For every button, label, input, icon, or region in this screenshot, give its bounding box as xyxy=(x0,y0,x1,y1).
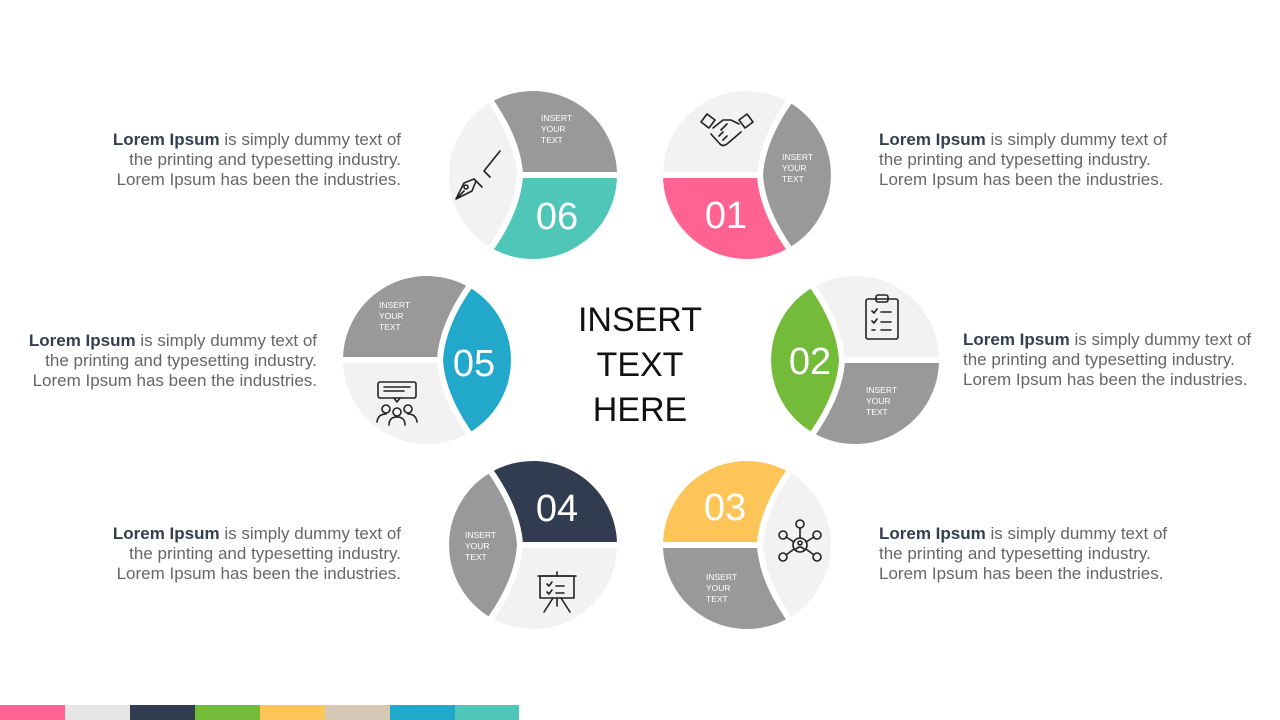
numbers: 03 xyxy=(704,487,746,529)
small labels: YOUR xyxy=(866,396,891,406)
text block 05 xyxy=(29,331,317,390)
color bar xyxy=(0,705,519,720)
numbers xyxy=(453,195,831,530)
small labels: TEXT xyxy=(379,322,401,332)
text block 02: Lorem Ipsum is simply dummy text of xyxy=(963,330,1251,349)
small labels: INSERT xyxy=(465,530,496,540)
circle 02 xyxy=(768,273,942,447)
icon: clipboard xyxy=(866,295,898,339)
text block 04: Lorem Ipsum is simply dummy text of xyxy=(113,524,401,543)
small labels: TEXT xyxy=(866,407,888,417)
text block 03: Lorem Ipsum has been the industries. xyxy=(879,564,1163,583)
text block 01: Lorem Ipsum has been the industries. xyxy=(879,170,1163,189)
text block 01: the printing and typesetting industry. xyxy=(879,150,1151,169)
circle 06 xyxy=(446,88,620,262)
circle 03 xyxy=(660,458,834,632)
text block 03 xyxy=(879,524,1167,583)
small labels: INSERT xyxy=(541,113,572,123)
circle 05 xyxy=(340,273,514,447)
numbers: 01 xyxy=(705,195,747,237)
icon: network xyxy=(779,520,821,561)
text block 01 xyxy=(879,130,1167,189)
text block 01: Lorem Ipsum is simply dummy text of xyxy=(879,130,1167,149)
numbers: 02 xyxy=(789,341,831,383)
small labels: INSERT xyxy=(782,152,813,162)
small labels xyxy=(379,113,897,604)
text block 03: Lorem Ipsum is simply dummy text of xyxy=(879,524,1167,543)
small labels: TEXT xyxy=(782,174,804,184)
text block 06 xyxy=(113,130,401,189)
small labels: YOUR xyxy=(465,541,490,551)
small labels: INSERT xyxy=(706,572,737,582)
text block 03: the printing and typesetting industry. xyxy=(879,544,1151,563)
small labels: INSERT xyxy=(379,300,410,310)
icon: handshake xyxy=(701,114,753,146)
small labels: YOUR xyxy=(706,583,731,593)
small labels: YOUR xyxy=(379,311,404,321)
numbers: 04 xyxy=(536,488,578,530)
small labels: TEXT xyxy=(706,594,728,604)
small labels: TEXT xyxy=(541,135,563,145)
small labels: TEXT xyxy=(465,552,487,562)
text block 06: Lorem Ipsum has been the industries. xyxy=(117,170,401,189)
icon: fountain pen xyxy=(456,151,500,199)
text block 04 xyxy=(113,524,401,583)
small labels: INSERT xyxy=(866,385,897,395)
numbers: 05 xyxy=(453,343,495,385)
small labels: YOUR xyxy=(541,124,566,134)
text block 05: the printing and typesetting industry. xyxy=(45,351,317,370)
icon: easel xyxy=(538,572,576,612)
center title: INSERT xyxy=(578,301,702,339)
small labels: YOUR xyxy=(782,163,807,173)
text block 05: Lorem Ipsum is simply dummy text of xyxy=(29,331,317,350)
text block 04: the printing and typesetting industry. xyxy=(129,544,401,563)
text block 02: Lorem Ipsum has been the industries. xyxy=(963,370,1247,389)
center title xyxy=(578,301,702,429)
text block 04: Lorem Ipsum has been the industries. xyxy=(117,564,401,583)
text block 05: Lorem Ipsum has been the industries. xyxy=(33,371,317,390)
circle 04 xyxy=(446,458,620,632)
icon: meeting xyxy=(377,382,417,425)
circle 01 xyxy=(660,88,834,262)
numbers: 06 xyxy=(536,196,578,238)
text block 06: the printing and typesetting industry. xyxy=(129,150,401,169)
center title: TEXT xyxy=(597,346,683,384)
text block 02 xyxy=(963,330,1251,389)
text block 02: the printing and typesetting industry. xyxy=(963,350,1235,369)
center title: HERE xyxy=(593,391,687,429)
text block 06: Lorem Ipsum is simply dummy text of xyxy=(113,130,401,149)
